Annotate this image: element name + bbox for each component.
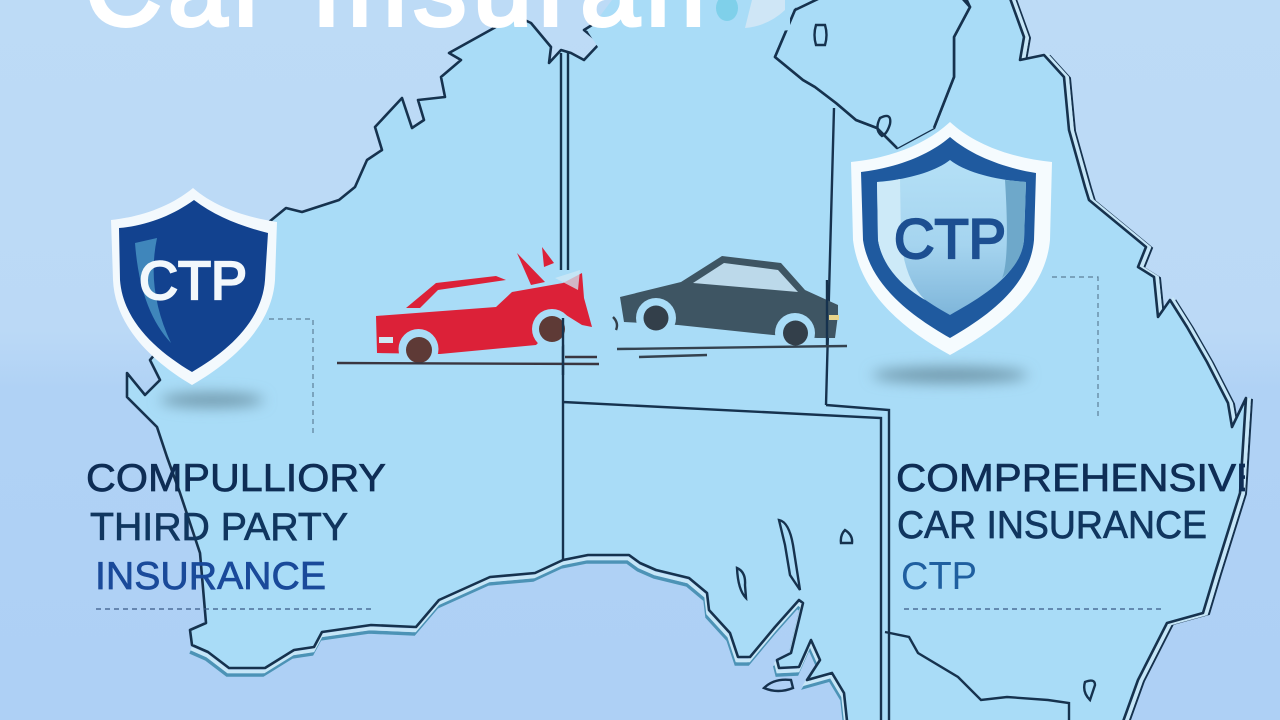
state borders bbox=[561, 53, 1069, 720]
hide outline where land reaches the page top bbox=[588, 0, 790, 50]
left heading: compulsory third party: COMPULLIORY bbox=[86, 457, 386, 500]
shield shadow bbox=[872, 367, 1028, 383]
shield label: CTP bbox=[894, 207, 1006, 270]
left heading: compulsory third party: THIRD PARTY bbox=[90, 506, 348, 549]
shield shadow bbox=[160, 393, 264, 407]
gulf of Carpentaria tint bbox=[775, 0, 970, 148]
red crashed car bbox=[337, 247, 599, 369]
shield label: CTP bbox=[139, 251, 247, 311]
right heading: comprehensive car insurance: COMPREHENSIVE bbox=[896, 457, 1264, 500]
islands and lakes bbox=[737, 25, 1095, 700]
NT border overlaying cars bbox=[563, 280, 827, 375]
right heading: comprehensive car insurance: CAR INSURANCE bbox=[897, 504, 1207, 547]
grey car bbox=[613, 256, 847, 357]
left CTP shield bbox=[111, 188, 277, 407]
ground line bbox=[617, 346, 847, 357]
right CTP shield bbox=[851, 122, 1052, 383]
right heading: comprehensive car insurance: CTP bbox=[901, 555, 977, 598]
dashed leader lines bbox=[96, 277, 1162, 609]
left heading: compulsory third party bbox=[86, 457, 386, 598]
left heading: compulsory third party: INSURANCE bbox=[95, 555, 326, 598]
right heading: comprehensive car insurance bbox=[898, 463, 1245, 590]
ground line bbox=[337, 357, 599, 364]
